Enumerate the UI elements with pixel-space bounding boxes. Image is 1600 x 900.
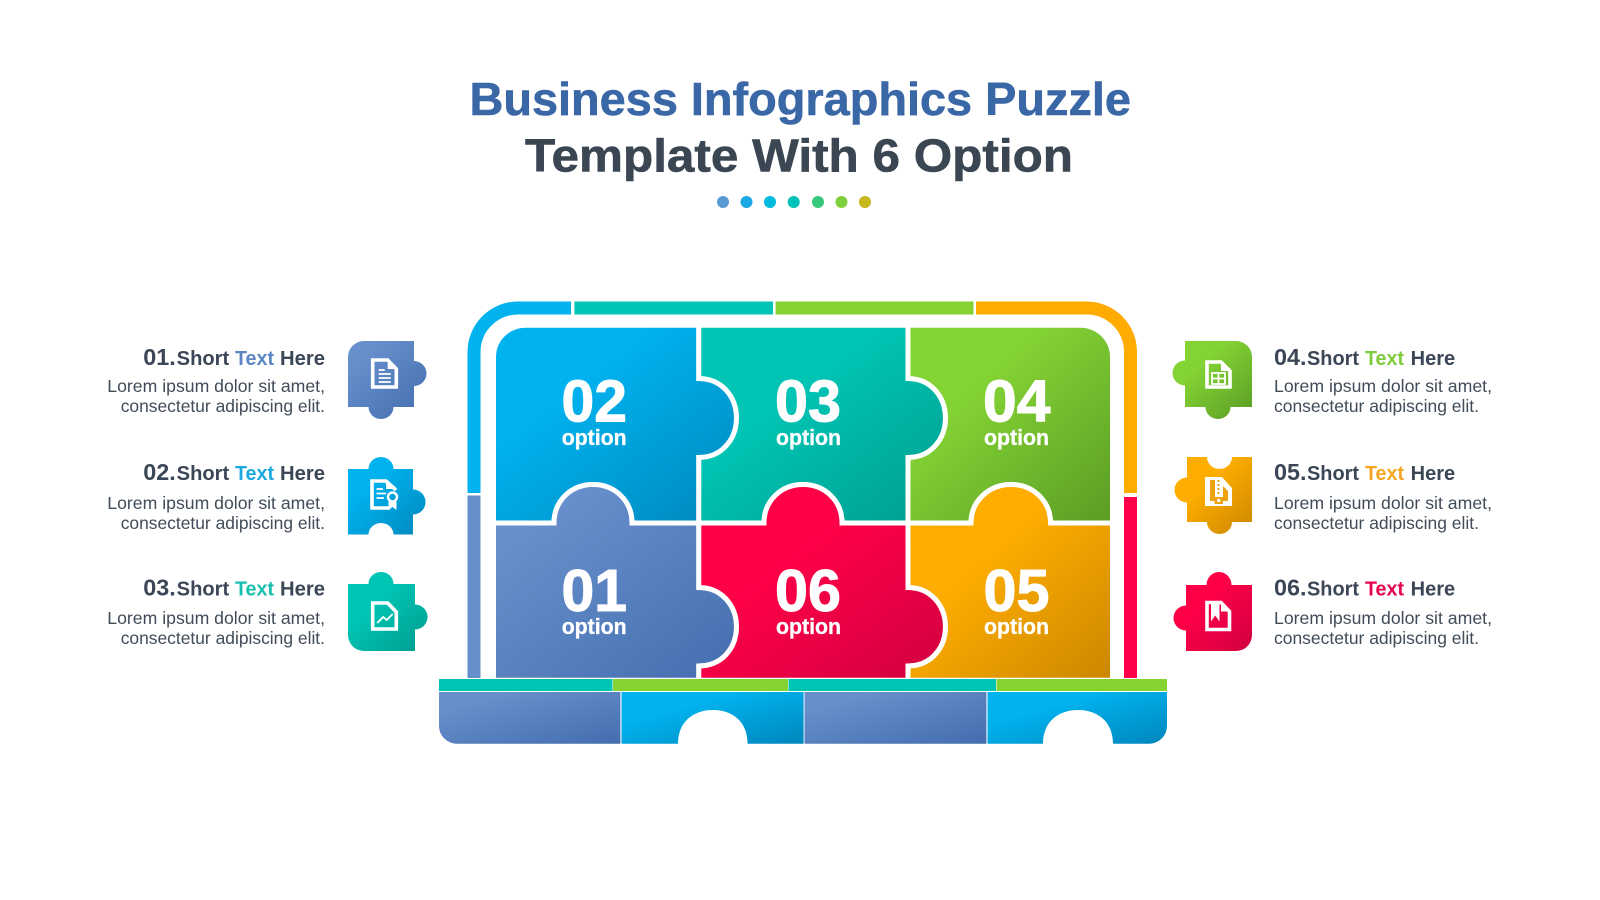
item 06: Lorem ipsum dolor sit amet, — [1274, 608, 1492, 628]
piece 01 — [494, 484, 736, 680]
item 04: Lorem ipsum dolor sit amet, — [1274, 376, 1492, 396]
puzzle piece labels — [562, 369, 1051, 639]
item 03: Lorem ipsum dolor sit amet, — [107, 608, 325, 628]
item 06: 06. — [1274, 575, 1306, 601]
item 01: Here — [280, 348, 325, 370]
puzzle piece labels: 01 — [562, 558, 627, 624]
icon 01: document puzzle piece — [348, 341, 426, 419]
item 02: Text — [235, 463, 274, 485]
laptop base — [439, 679, 1167, 744]
puzzle piece labels: 02 — [562, 369, 627, 435]
icon 05: zip file puzzle piece — [1174, 457, 1252, 534]
item 04: Short — [1307, 348, 1359, 370]
icon 03: chart document puzzle piece — [348, 572, 428, 651]
piece 02 — [494, 325, 736, 523]
piece 04 — [908, 325, 1112, 523]
title: Business Infographics Puzzle — [470, 73, 1131, 125]
item 05: Lorem ipsum dolor sit amet, — [1274, 493, 1492, 513]
item 05: Short — [1307, 463, 1359, 485]
item 04: 04. — [1274, 344, 1306, 370]
puzzle piece labels: 04 — [983, 369, 1051, 435]
item 06: Short — [1307, 579, 1359, 601]
item 01: Text — [235, 348, 274, 370]
item 06 — [1274, 575, 1492, 648]
title — [470, 73, 1131, 182]
icon 02: certificate puzzle piece — [348, 457, 426, 534]
item 01: consectetur adipiscing elit. — [121, 396, 325, 416]
item 05: consectetur adipiscing elit. — [1274, 513, 1479, 533]
piece 05 — [908, 484, 1112, 680]
item 02: 02. — [143, 459, 176, 485]
item 04 — [1274, 344, 1492, 416]
item 01: Short — [177, 348, 230, 370]
decorative dot row — [717, 196, 871, 208]
item 03: 03. — [143, 575, 176, 601]
icon 04: spreadsheet puzzle piece — [1172, 341, 1252, 419]
puzzle piece labels: 05 — [984, 558, 1050, 624]
item 03 — [107, 575, 325, 648]
puzzle piece labels: 03 — [775, 369, 841, 435]
item 05 — [1274, 459, 1492, 533]
item 02: consectetur adipiscing elit. — [121, 513, 325, 533]
puzzle piece labels: option — [776, 425, 841, 450]
item 02: Lorem ipsum dolor sit amet, — [107, 493, 325, 513]
item 01: 01. — [143, 344, 176, 370]
item 02: Here — [280, 463, 325, 485]
title: Template With 6 Option — [525, 130, 1073, 182]
puzzle piece labels: option — [562, 425, 627, 450]
item 01: Lorem ipsum dolor sit amet, — [107, 376, 325, 396]
item 02: Short — [177, 463, 230, 485]
item 05: Here — [1411, 463, 1455, 485]
item 02 — [107, 459, 325, 533]
item 04: Here — [1411, 348, 1455, 370]
item 03: consectetur adipiscing elit. — [121, 628, 325, 648]
puzzle piece labels: option — [984, 614, 1049, 639]
item 04: consectetur adipiscing elit. — [1274, 396, 1479, 416]
puzzle screen — [494, 325, 1112, 680]
puzzle piece labels: 06 — [775, 558, 841, 624]
item 05: Text — [1365, 463, 1404, 485]
item 06: Here — [1411, 579, 1455, 601]
piece 06 — [699, 484, 946, 680]
piece 03 — [699, 325, 946, 523]
item 05: 05. — [1274, 459, 1306, 485]
puzzle piece labels: option — [776, 614, 841, 639]
item 03: Here — [280, 579, 325, 601]
icon 06: bookmark puzzle piece — [1174, 572, 1252, 651]
item 06: Text — [1365, 579, 1404, 601]
item 01 — [107, 344, 325, 416]
item 03: Text — [235, 579, 274, 601]
puzzle piece labels: option — [984, 425, 1049, 450]
item 04: Text — [1365, 348, 1404, 370]
item 03: Short — [177, 579, 230, 601]
laptop screen frame — [474, 308, 1130, 678]
puzzle piece labels: option — [562, 614, 627, 639]
item 06: consectetur adipiscing elit. — [1274, 628, 1479, 648]
